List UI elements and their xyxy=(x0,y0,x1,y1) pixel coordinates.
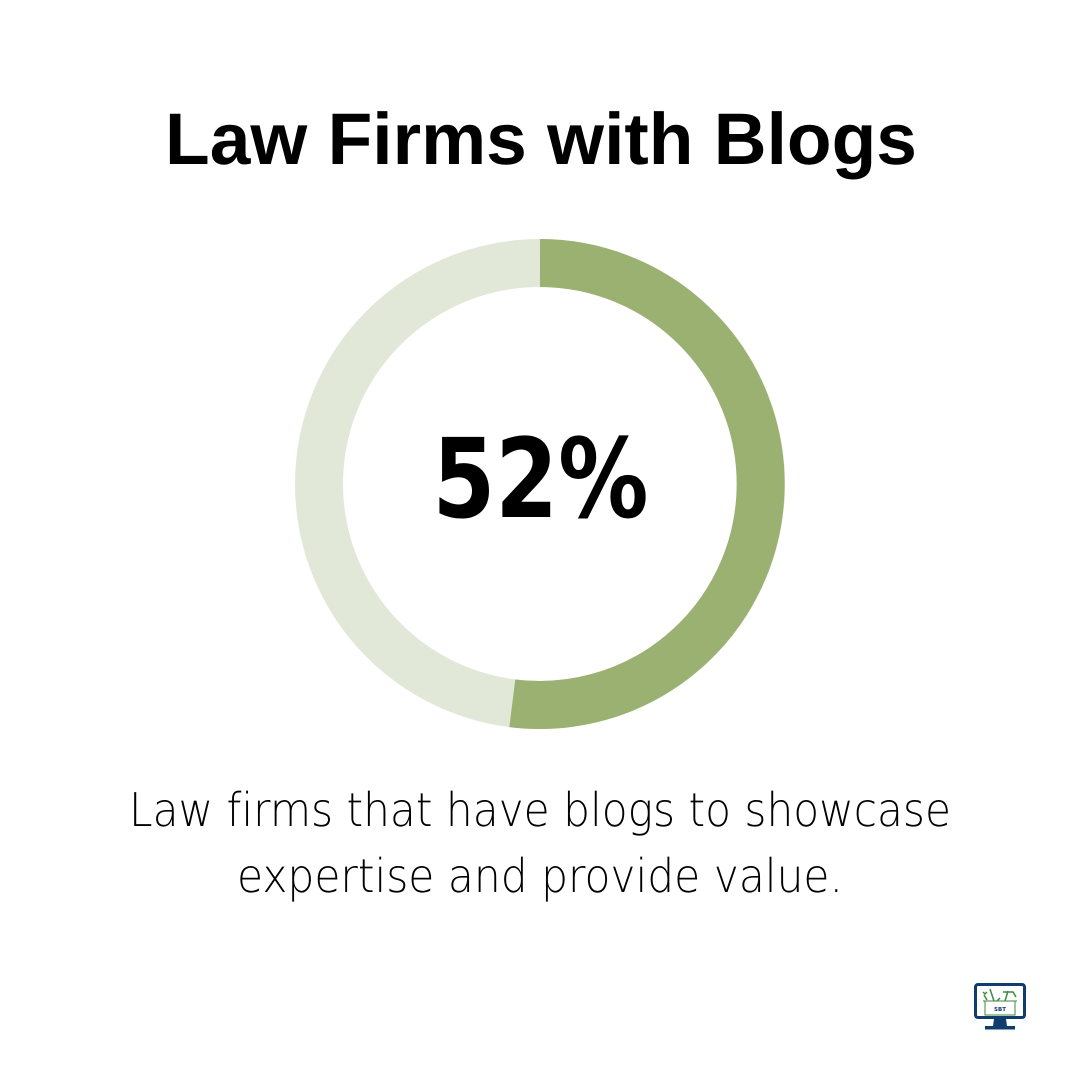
description line 2: expertise and provide value. xyxy=(237,849,843,903)
donut track xyxy=(319,263,761,705)
description text xyxy=(129,783,951,903)
logo text: SBT xyxy=(994,1006,1006,1013)
donut value arc xyxy=(512,263,761,705)
center value: 52% xyxy=(432,415,648,543)
icon: SBT monitor logo xyxy=(976,984,1024,1030)
monitor screen xyxy=(976,984,1024,1018)
toolbox xyxy=(983,1001,1017,1015)
description line 1: Law firms that have blogs to showcase xyxy=(129,783,951,837)
title: Law Firms with Blogs xyxy=(165,99,917,180)
tools: wrench, screwdriver, hammer xyxy=(983,989,1016,1001)
donut chart: 52 percent xyxy=(319,263,761,705)
monitor stand xyxy=(985,1019,1015,1030)
